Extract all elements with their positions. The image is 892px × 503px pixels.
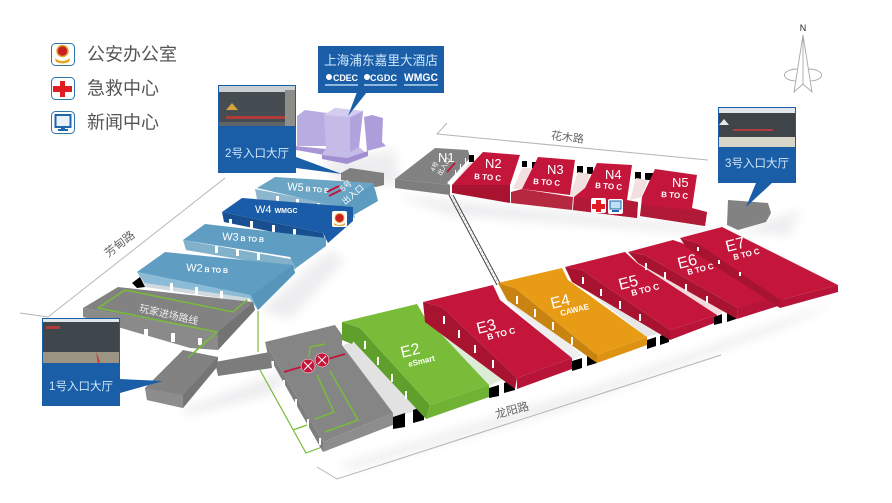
hall N1: N1 [438,150,455,165]
callout: entrance hall 2 [218,85,342,174]
hall N1: 出入口 [435,156,452,177]
legend: press center: 新闻中心 [87,112,159,132]
callout: hotel [318,46,444,116]
road: 芳甸路 [20,178,225,317]
icon: police badge [332,211,347,227]
hall E4 [498,268,669,363]
hall W5: W5 B TO B [287,181,330,196]
hall W4: W4 WMGC [255,204,298,216]
icon: first aid [591,198,606,213]
hotel buildings [295,108,386,164]
hall W2 [132,252,295,310]
callout: entrance hall 3 [718,107,796,207]
hall N2 [452,152,520,203]
gray hall S [265,325,424,452]
callout: hotel: 上海浦东嘉里大酒店 [324,53,438,68]
icon: no entry markers [301,353,329,373]
hall N4: N4 [605,167,622,182]
hall E5: E5 [617,273,640,294]
building: entrance hall 3 [727,200,771,230]
callout: entrance hall 3: 3号入口大厅 [725,156,789,170]
hall E4: CAWAE [559,302,591,318]
gray hall with player route [83,287,255,358]
road: 芳甸路: 芳甸路 [102,227,138,260]
icon: press [608,199,623,214]
hall N5: N5 [672,175,689,190]
callout: hotel: WMGC [404,72,438,84]
gray hall with player route: 玩家进场路线 [138,302,199,328]
hall E4: E4 [549,292,572,313]
hall N4: B TO C [595,181,623,192]
legend: first aid: 急救中心 [87,78,159,98]
callout: entrance hall 1: 1号入口大厅 [49,379,113,393]
road: 龙阳路: 龙阳路 [493,399,531,421]
hall W5 [255,177,378,218]
hall N1: 4号 [429,160,441,173]
hall E2 [342,304,515,419]
road: 龙阳路 [317,355,721,479]
hall W5: 出入口 [340,182,366,207]
callout: entrance hall 2: 2号入口大厅 [225,146,289,160]
callout: hotel: CGDC [370,73,398,83]
hall N3: B TO C [533,177,561,188]
hall E5: B TO C [630,281,660,298]
callout: hotel: CDEC [333,73,358,83]
hall E6 [628,240,783,319]
hall E5 [565,252,736,340]
soft ground shadows [180,150,840,470]
green outdoor route [258,311,322,453]
compass: N [800,23,806,33]
road: 花木路: 花木路 [550,129,585,146]
label: E6: B TO C [686,262,715,277]
hall N3: N3 [547,162,564,177]
label: E6: E6 [676,252,699,273]
compass [784,23,822,92]
hall W2: W2 B TO B [186,262,228,276]
hall E2: eSmart [407,354,436,369]
hall W3: W3 B TO B [222,231,264,245]
label: E6 [676,252,715,277]
hall N2: B TO C [474,172,502,183]
callout: entrance hall 1 [42,318,163,406]
hall W5: 5号 [339,179,354,194]
cable bridge [449,195,501,285]
hall E2: E2 [399,341,422,362]
hall E7: B TO C [732,247,761,262]
hall N5 [630,169,707,226]
hall E3: E3 [475,317,498,338]
building: small gray block near W5 [341,168,384,187]
legend: police office: 公安办公室 [87,44,177,64]
hall E3: B TO C [486,325,516,342]
hall E7: E7 [724,235,747,256]
legend [52,44,177,134]
hall N3 [511,157,575,210]
hall W4 [222,198,353,243]
hall N4 [570,163,638,218]
hall E3 [423,285,597,389]
hall N1 [395,148,470,195]
hall N5: B TO C [661,190,689,201]
road: 花木路 [437,123,708,160]
entrance hall 1 lobby and bridge [145,340,272,408]
hall N2: N2 [485,156,502,171]
hall W3 [183,224,326,269]
hall E7 [680,227,838,308]
